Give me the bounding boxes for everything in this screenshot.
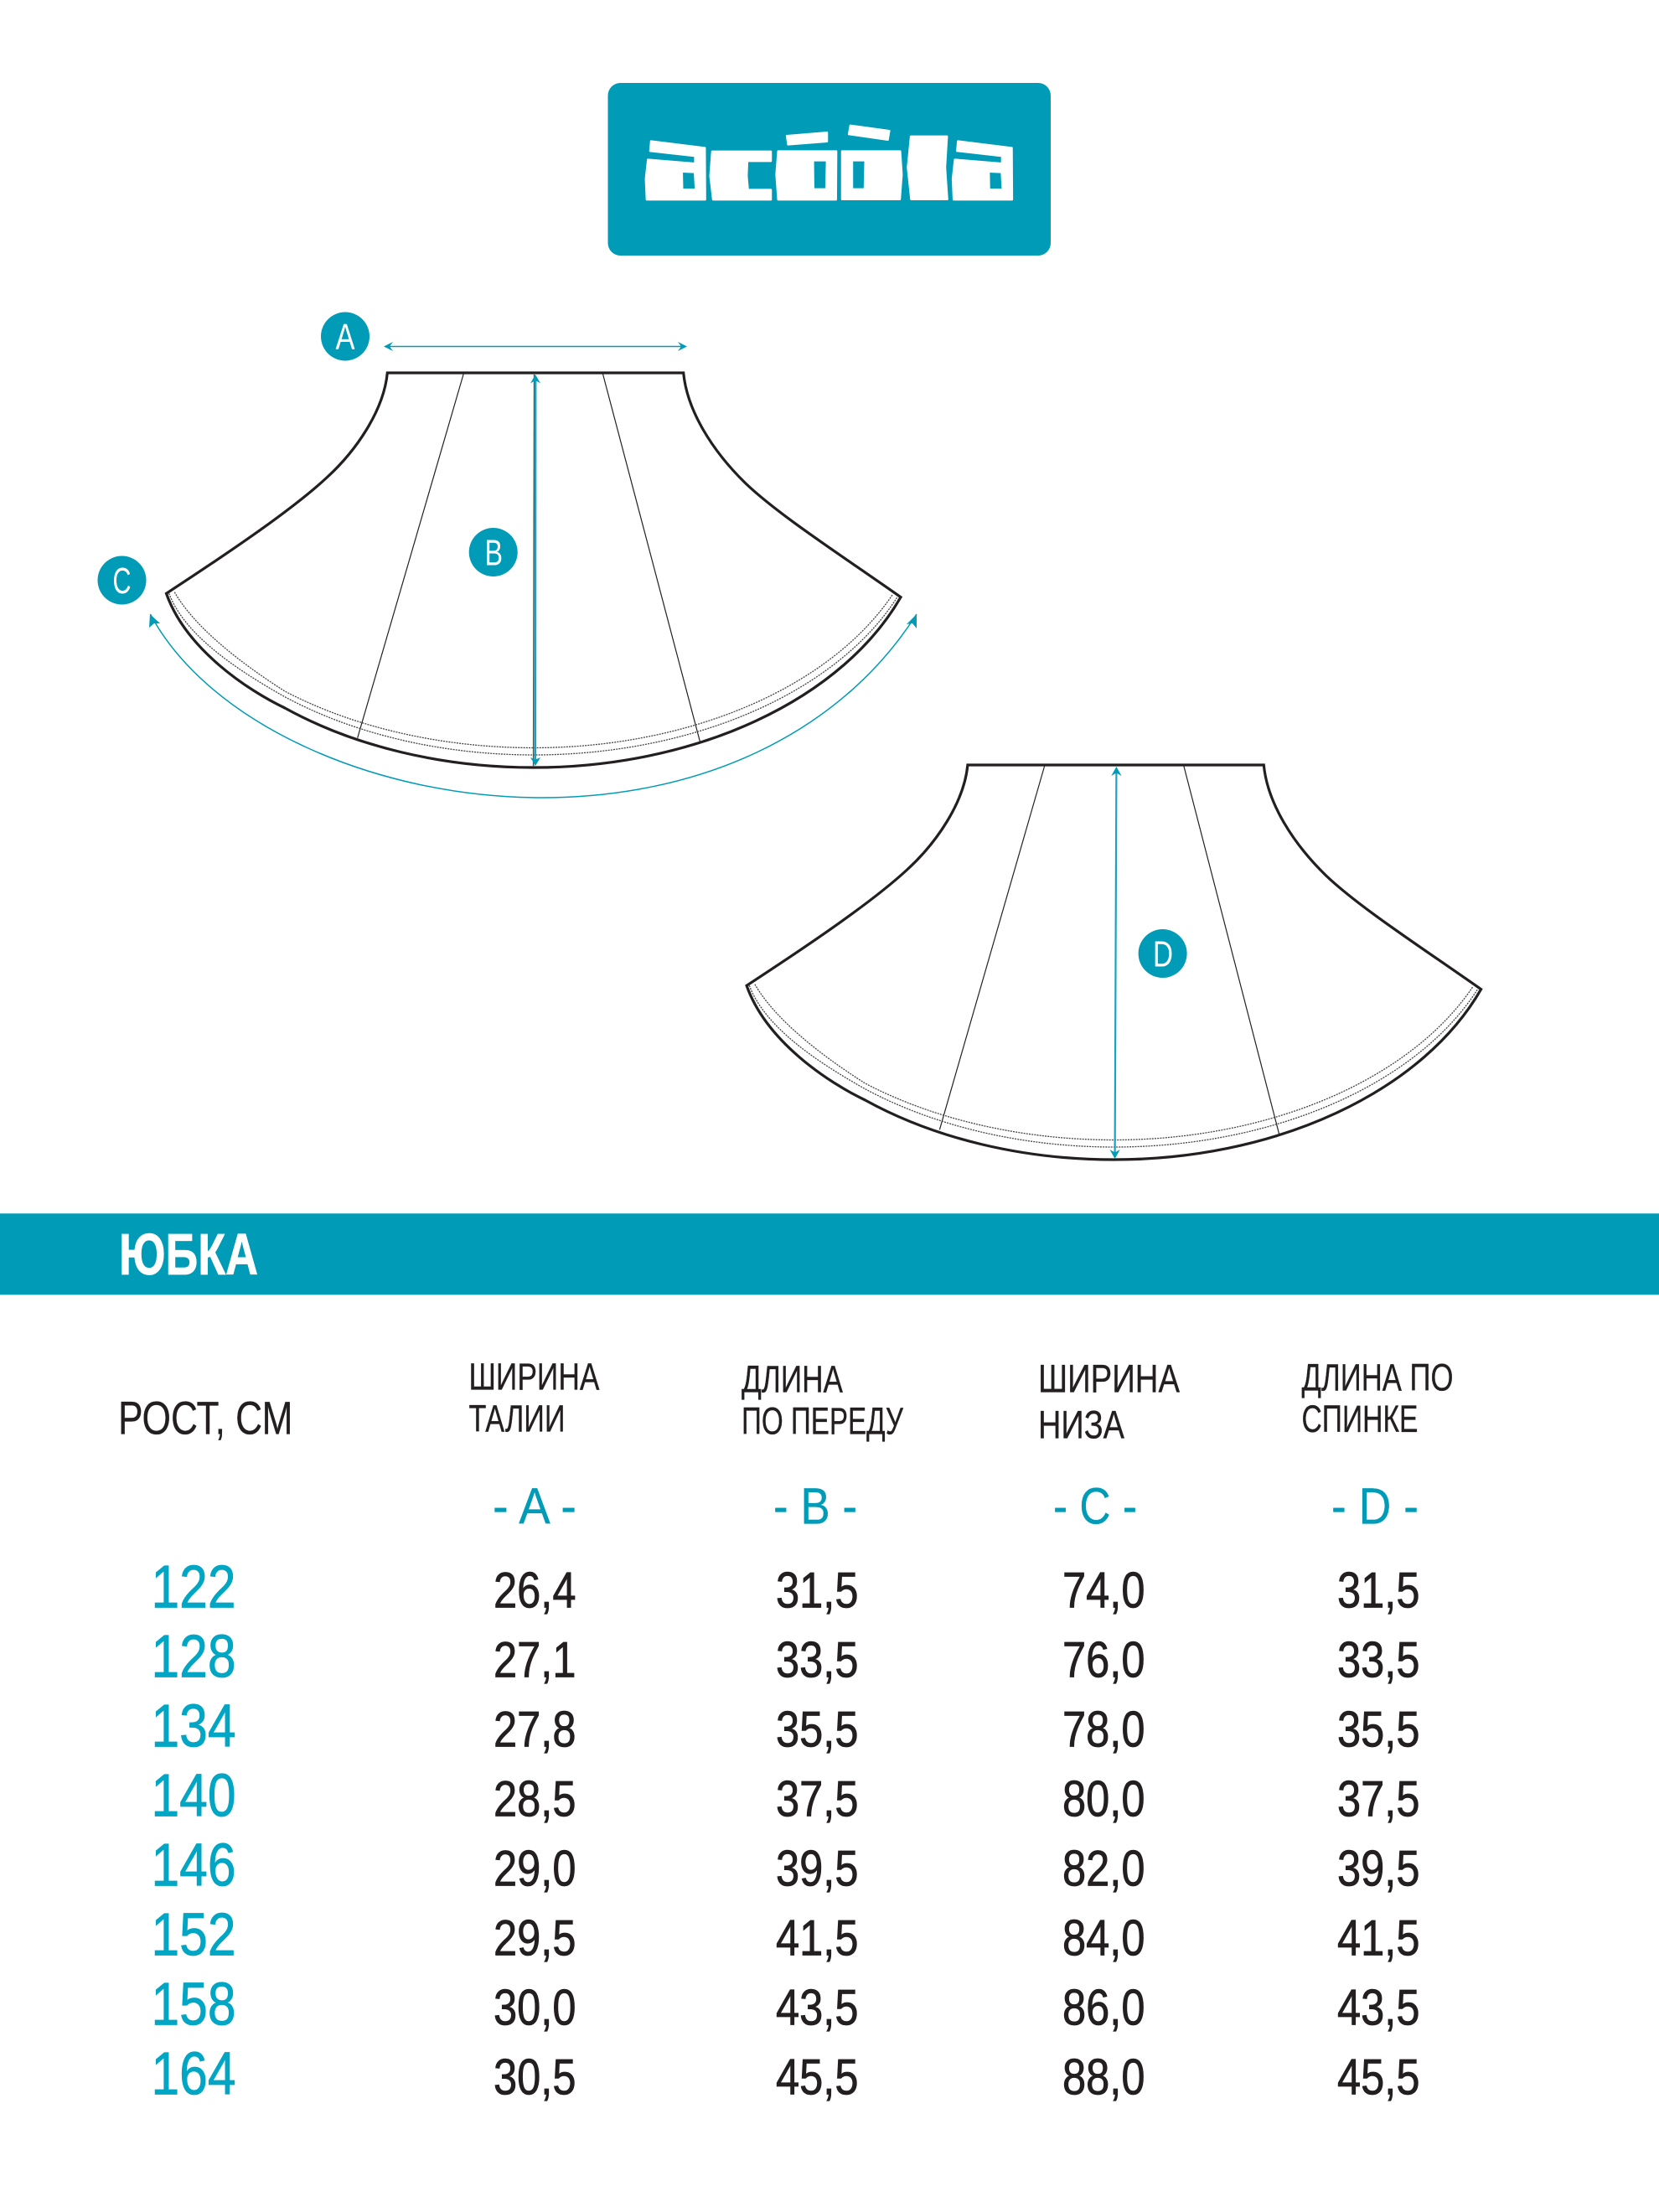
row 164: 45,5 — [776, 2049, 858, 2105]
row 158: 30,0 — [494, 1979, 576, 2035]
table header: hem width: НИЗА — [1038, 1403, 1125, 1447]
back skirt diagram — [747, 765, 1481, 1160]
row 122 — [151, 1553, 1419, 1620]
row 152: 84,0 — [1062, 1910, 1145, 1966]
row 140: 80,0 — [1062, 1770, 1145, 1827]
logo: acoola — [608, 83, 1051, 256]
row 152: 152 — [151, 1901, 236, 1968]
row 122: 31,5 — [776, 1562, 858, 1618]
row 158: 43,5 — [1337, 1979, 1419, 2035]
table header: hem width — [1038, 1357, 1181, 1447]
title band: ЮБКА — [119, 1222, 258, 1287]
row 158: 43,5 — [776, 1979, 858, 2035]
row 134: 35,5 — [1337, 1701, 1419, 1757]
table header: back length — [1302, 1356, 1453, 1440]
row 152: 29,5 — [494, 1910, 576, 1966]
column letters: - B - — [773, 1477, 857, 1534]
row 164 — [151, 2040, 1419, 2107]
hem stitching — [749, 985, 1477, 1147]
row 134 — [151, 1693, 1419, 1760]
seams — [939, 766, 1279, 1135]
arrow A: waist width — [384, 342, 687, 351]
row 140: 37,5 — [1337, 1770, 1419, 1827]
table header: back length: ДЛИНА ПО — [1302, 1356, 1453, 1398]
row 164: 45,5 — [1337, 2049, 1419, 2105]
row 140 — [151, 1762, 1419, 1829]
row 140: 28,5 — [494, 1770, 576, 1827]
table header: front length: ДЛИНА — [742, 1358, 843, 1401]
row 122: 31,5 — [1337, 1562, 1419, 1618]
row 146: 29,0 — [494, 1840, 576, 1896]
row 146 — [151, 1832, 1419, 1899]
size table rows — [151, 1553, 1419, 2107]
column letters: - A - — [493, 1477, 576, 1534]
badge B: B — [484, 533, 503, 573]
title band — [0, 1213, 1659, 1295]
row 146: 146 — [151, 1832, 236, 1899]
row 158: 86,0 — [1062, 1979, 1145, 2035]
row 128: 76,0 — [1062, 1631, 1145, 1687]
row 152: 41,5 — [1337, 1910, 1419, 1966]
column letters — [493, 1477, 1419, 1534]
row 164: 88,0 — [1062, 2049, 1145, 2105]
row 146: 39,5 — [1337, 1840, 1419, 1896]
table header: front length: ПО ПЕРЕДУ — [742, 1400, 903, 1443]
arrow D: back length — [1109, 767, 1121, 1159]
front skirt diagram — [97, 312, 917, 798]
skirt outline — [166, 373, 901, 767]
row 152 — [151, 1901, 1419, 1968]
row 146: 82,0 — [1062, 1840, 1145, 1896]
row 158: 158 — [151, 1971, 236, 2038]
row 140: 37,5 — [776, 1770, 858, 1827]
table header: hem width: ШИРИНА — [1038, 1357, 1181, 1401]
badge A — [321, 312, 370, 360]
table header: front length — [742, 1358, 903, 1443]
row 152: 41,5 — [776, 1910, 858, 1966]
row 134: 78,0 — [1062, 1701, 1145, 1757]
arrow B: front length — [530, 375, 540, 767]
row 134: 134 — [151, 1693, 236, 1760]
row 122: 74,0 — [1062, 1562, 1145, 1618]
row 134: 35,5 — [776, 1701, 858, 1757]
badge D — [1139, 929, 1187, 978]
row 134: 27,8 — [494, 1701, 576, 1757]
row 128: 33,5 — [1337, 1631, 1419, 1687]
table header: height: РОСТ, СМ — [118, 1392, 293, 1445]
row 128 — [151, 1623, 1419, 1690]
row 128: 128 — [151, 1623, 236, 1690]
badge B — [469, 528, 518, 576]
row 122: 26,4 — [494, 1562, 576, 1618]
row 146: 39,5 — [776, 1840, 858, 1896]
seams — [358, 374, 700, 743]
column letters: - D - — [1331, 1477, 1419, 1534]
table header: back length: СПИНКЕ — [1302, 1398, 1418, 1440]
badge C — [97, 556, 146, 605]
table header: waist width: ШИРИНА — [469, 1356, 600, 1398]
row 140: 140 — [151, 1762, 236, 1829]
badge D: D — [1153, 933, 1173, 975]
hem stitching — [169, 592, 897, 755]
row 164: 164 — [151, 2040, 236, 2107]
row 128: 33,5 — [776, 1631, 858, 1687]
row 158 — [151, 1971, 1419, 2038]
row 164: 30,5 — [494, 2049, 576, 2105]
row 128: 27,1 — [494, 1631, 576, 1687]
row 122: 122 — [151, 1553, 236, 1620]
arrow C: hem width — [149, 614, 917, 798]
column letters: - C - — [1053, 1477, 1137, 1534]
table header: waist width: ТАЛИИ — [469, 1398, 565, 1439]
table header: waist width — [469, 1356, 600, 1439]
badge A: A — [335, 317, 355, 358]
badge C: C — [112, 561, 131, 602]
skirt outline — [747, 765, 1481, 1160]
